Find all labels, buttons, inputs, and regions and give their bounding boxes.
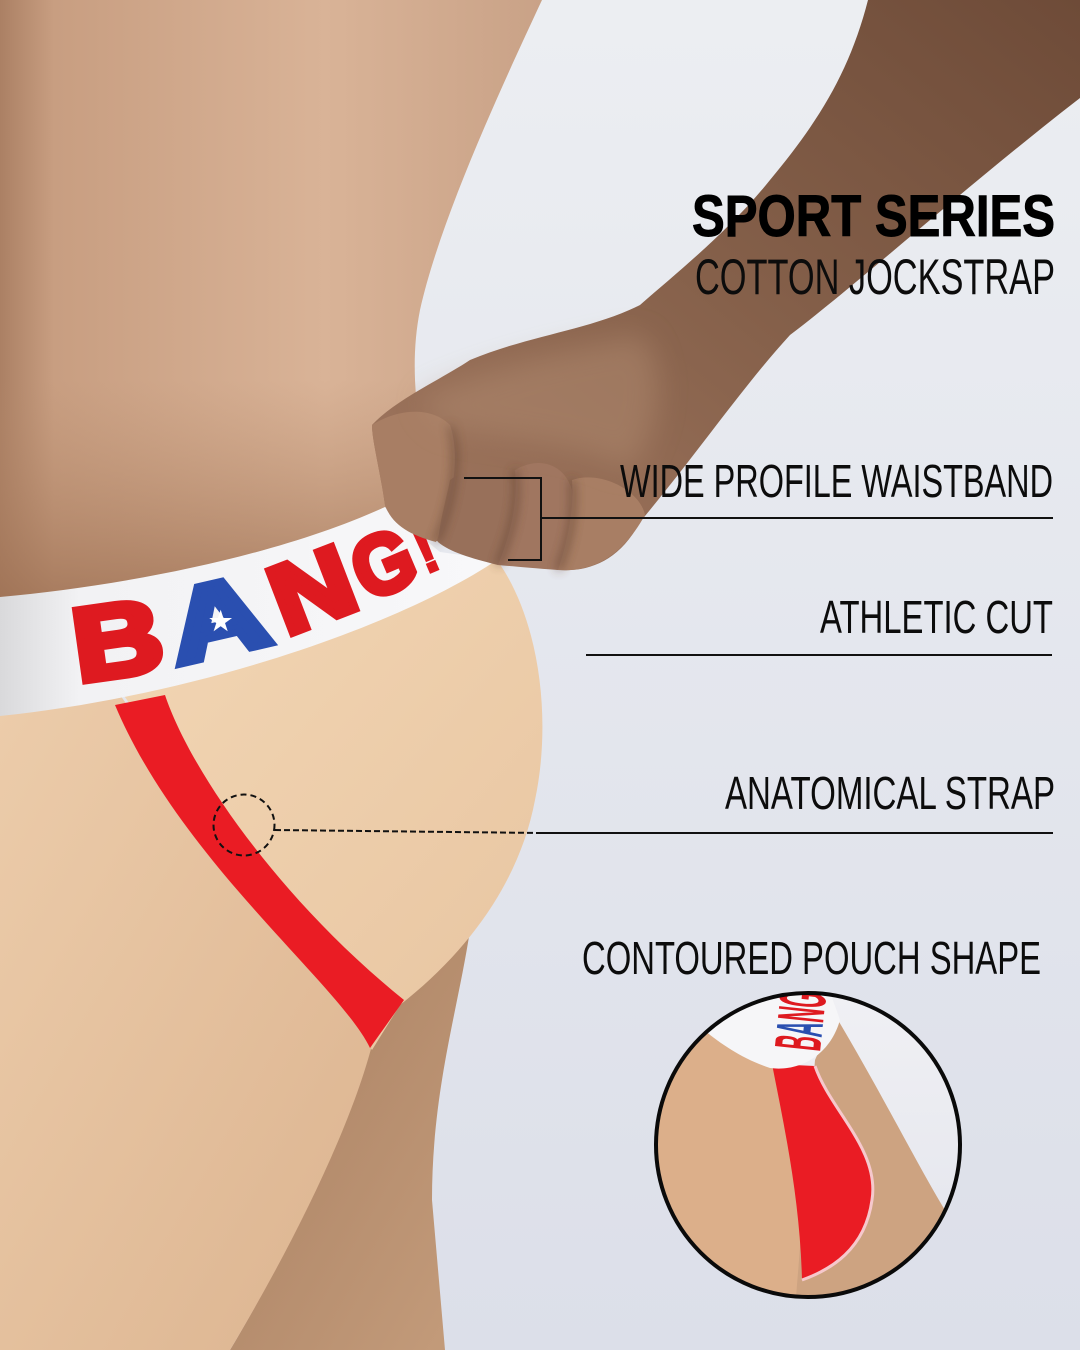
inset: pouch detail bbox=[650, 988, 970, 1310]
fingers bbox=[372, 412, 645, 570]
text: BANG bbox=[760, 988, 840, 1053]
waistband with logo bbox=[0, 507, 497, 716]
waistband with logo: N bbox=[254, 524, 370, 656]
figure: torso and legs bbox=[0, 0, 542, 1350]
waistband with logo: A bbox=[156, 552, 280, 687]
callout: wide profile waistband bbox=[464, 455, 1053, 560]
waistband with logo: ! bbox=[405, 517, 448, 586]
waistband with logo: G bbox=[337, 509, 429, 619]
arm and hand bbox=[372, 0, 1080, 570]
red strap bbox=[115, 695, 404, 1048]
waistband with logo: ★ bbox=[209, 606, 233, 636]
callout: anatomical strap bbox=[214, 767, 1055, 856]
waistband with logo: B bbox=[65, 577, 170, 705]
title bbox=[692, 184, 1055, 305]
